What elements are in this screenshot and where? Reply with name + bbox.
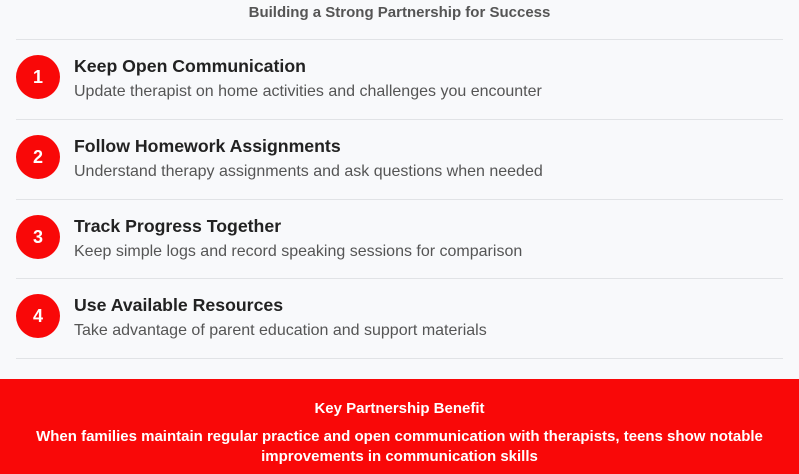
desc 3: Keep simple logs and record speaking sessions for comparison bbox=[74, 243, 522, 260]
desc 1: Update therapist on home activities and challenges you encounter bbox=[74, 83, 542, 100]
heading 3: Track Progress Together bbox=[74, 216, 281, 236]
item 2 bbox=[16, 135, 543, 180]
icon: number 2: 2 bbox=[33, 147, 43, 167]
item 4 bbox=[16, 294, 487, 339]
desc 2: Understand therapy assignments and ask questions when needed bbox=[74, 163, 543, 180]
icon: number 2 bbox=[16, 135, 60, 179]
icon: number 4 bbox=[16, 294, 60, 338]
icon: number 1: 1 bbox=[33, 67, 43, 87]
heading 4: Use Available Resources bbox=[74, 295, 283, 315]
item 1 bbox=[16, 55, 542, 100]
icon: number 3: 3 bbox=[33, 227, 43, 247]
icon: number 1 bbox=[16, 55, 60, 99]
callout text: When families maintain regular practice and open communication with therapists, teens show notable improvements in communication skills bbox=[36, 428, 763, 465]
footer callout bbox=[0, 379, 799, 474]
icon: number 3 bbox=[16, 215, 60, 259]
heading 2: Follow Homework Assignments bbox=[74, 136, 341, 156]
desc 4: Take advantage of parent education and support materials bbox=[74, 322, 487, 339]
callout title: Key Partnership Benefit bbox=[314, 400, 485, 417]
icon: number 4: 4 bbox=[33, 306, 43, 326]
heading 1: Keep Open Communication bbox=[74, 56, 306, 76]
title: Building a Strong Partnership for Success bbox=[249, 4, 550, 21]
item 3 bbox=[16, 215, 522, 260]
